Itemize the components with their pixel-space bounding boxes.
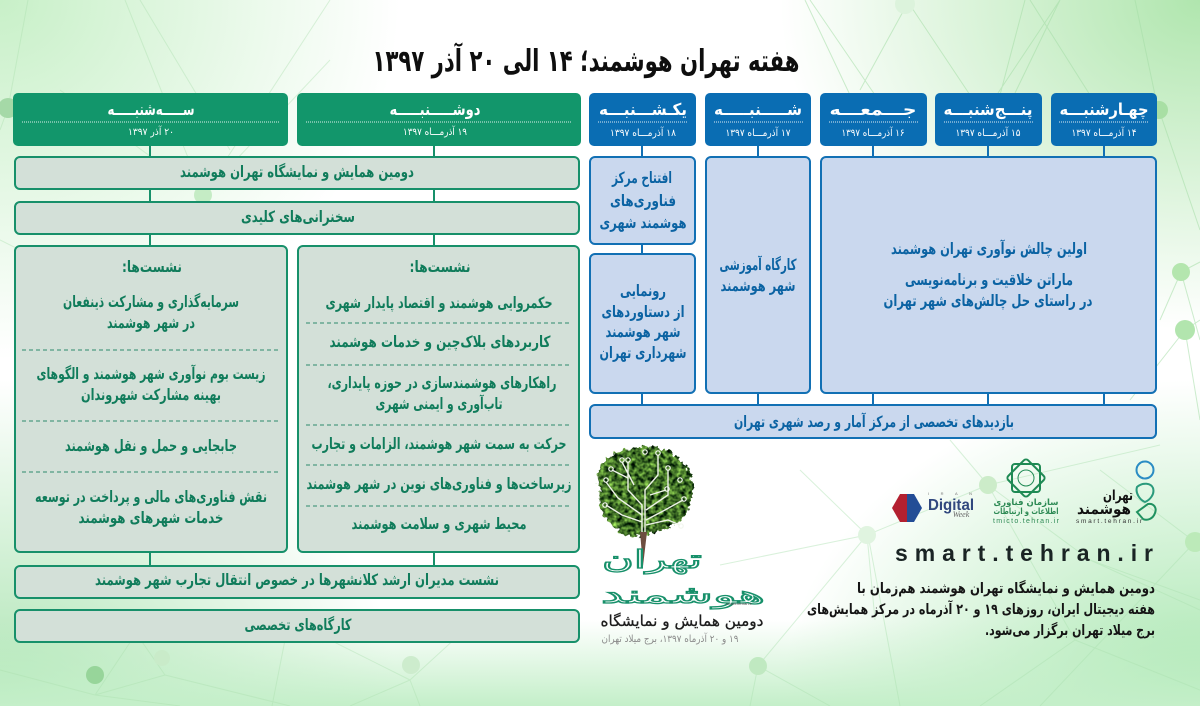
panel: achievements unveiling: رونمایی [620,282,666,300]
logo: circuit tree [598,447,693,566]
panel: center opening [590,157,695,244]
logo: Tehran Hooshmand small: smart.tehran.ir [1076,518,1143,525]
header: Wednesday [1051,93,1157,146]
logo: Tehran Hooshmand outlined wordmark: smart.tehran.ir [726,601,753,606]
header: Sunday [589,93,696,146]
panel: workshops row [15,610,579,642]
panel: Monday sessions: نشست‌ها: [410,258,470,276]
logo: Digital Week: IRAN [928,491,972,496]
logo: ICT organization: اطلاعات و ارتباطات [994,507,1059,517]
panel: specialist visits row [590,405,1156,438]
panel: training workshop [706,157,810,393]
header: Sunday: یکـشـــنبـــه [599,100,687,119]
website url: smart.tehran.ir [895,540,1153,566]
panel: Tuesday sessions: جابجایی و حمل و نقل هوشمند [65,437,237,455]
panel: Tuesday sessions [15,246,287,552]
logo: Digital Week: Digital [928,497,974,514]
panel: Monday sessions: تاب‌آوری و ایمنی شهری [376,394,502,413]
logo: Tehran Hooshmand small: هوشمند [1077,500,1131,518]
header: Monday [297,93,581,146]
panel: Tuesday sessions: نشست‌ها: [122,258,182,276]
logo: Tehran Hooshmand outlined wordmark [601,545,765,609]
panel: innovation challenge: ماراتن خلاقیت و برنامه‌نویسی [905,271,1073,289]
header: Wednesday: ۱۴ آذرمـــاه ۱۳۹۷ [1072,126,1136,139]
panel: Tuesday sessions: بهینه مشارکت شهروندان [81,386,221,404]
logo: ICT organization [993,458,1060,525]
panel: conference row: دومین همایش و نمایشگاه تهران هوشمند [180,162,414,181]
panel: innovation challenge: اولین چالش نوآوری تهران هوشمند [891,239,1087,259]
panel: senior managers row: نشست مدیران ارشد کلانشهرها در خصوص انتقال تجارب شهر هوشمند [95,571,499,589]
panel: center opening: فناوری‌های [610,192,676,210]
panel: Monday sessions: حرکت به سمت شهر هوشمند، الزامات و تجارب [312,435,566,453]
panel: Tuesday sessions: زیست بوم نوآوری شهر هوشمند و الگوهای [36,364,266,383]
panel: innovation challenge: در راستای حل چالش‌های شهر تهران [884,292,1093,311]
header: Tuesday: ۲۰ آذر ۱۳۹۷ [128,125,174,138]
logo caption: دومین همایش و نمایشگاه [600,612,764,630]
panel: Tuesday sessions: نقش فناوری‌های مالی و پرداخت در توسعه [35,488,267,507]
header: Tuesday [13,93,288,146]
connectors: blue columns [642,146,1104,404]
logo caption: ۱۹ و ۲۰ آذرماه ۱۳۹۷، برج میلاد تهران [602,632,738,645]
logo: Digital Week: Week [953,510,970,519]
panel: Monday sessions: محیط شهری و سلامت هوشمند [352,515,526,533]
header: Saturday: شـــــنبـــــه [714,100,802,119]
panel: training workshop: شهر هوشمند [720,277,796,295]
panel: specialist visits row: بازدیدهای تخصصی از مرکز آمار و رصد شهری تهران [734,412,1014,431]
header: Friday: جـــمعـــه [830,100,916,119]
logo: ICT organization: tmicto.tehran.ir [993,518,1060,525]
panel: Tuesday sessions: خدمات شهرهای هوشمند [78,509,224,527]
panel: innovation challenge [821,157,1156,393]
panel: center opening: افتتاح مرکز [611,169,672,187]
panel: training workshop: کارگاه آموزشی [720,255,797,274]
panel: achievements unveiling: شهرداری تهران [600,344,686,362]
header: Wednesday: چهـارشنبـــه [1060,100,1148,120]
logo: Tehran Hooshmand small: تهران [1103,488,1133,504]
panel: workshops row: کارگاه‌های تخصصی [244,615,352,634]
panel: Monday sessions: حکمروایی هوشمند و اقتصاد پایدار شهری [326,294,552,313]
panel: achievements unveiling: شهر هوشمند [606,323,680,341]
header: Thursday: ۱۵ آذرمـــاه ۱۳۹۷ [956,126,1020,139]
header: Thursday: پنـــج‌شنبـــه [944,100,1032,120]
logo: Digital Week [892,491,974,522]
header: Saturday: ۱۷ آذرمـــاه ۱۳۹۷ [726,126,791,139]
header: Thursday [935,93,1042,146]
logo: Tehran Hooshmand small [1076,462,1156,525]
panel: Monday sessions: زیرساخت‌ها و فناوری‌های نوین در شهر هوشمند [306,475,572,493]
panel: achievements unveiling [590,254,695,393]
title: هفته تهران هوشمند؛ ۱۴ الی ۲۰ آذر ۱۳۹۷ [372,42,800,79]
panel: Monday sessions: راهکارهای هوشمندسازی در حوزه پایداری، [328,374,556,393]
panel: Monday sessions [298,246,579,552]
header: Friday: ۱۶ آذرمـــاه ۱۳۹۷ [842,126,904,139]
panel: center opening: هوشمند شهری [600,214,686,232]
panel: senior managers row [15,566,579,598]
header: Tuesday: ســـــه‌شنبـــــه [108,100,194,119]
logo caption [600,612,764,645]
header: Monday: دوشـــــنبـــــه [390,100,480,120]
panel: conference row [15,157,579,189]
panel: Monday sessions: کاربردهای بلاک‌چین و خدمات هوشمند [330,333,551,352]
panel: achievements unveiling: از دستاوردهای [602,303,684,321]
panel: keynotes row [15,202,579,234]
header: Friday [820,93,927,146]
panel: Tuesday sessions: سرمایه‌گذاری و مشارکت ذینفعان [63,292,239,311]
header: Monday: ۱۹ آذرمـــاه ۱۳۹۷ [403,125,467,138]
logo: Tehran Hooshmand outlined wordmark: هوشمند [601,581,765,609]
connectors: green column [150,146,434,565]
header: Saturday [705,93,811,146]
header: Sunday: ۱۸ آذرمـــاه ۱۳۹۷ [610,126,677,139]
panel: Tuesday sessions: در شهر هوشمند [107,314,195,332]
description paragraph: هفته دیجیتال ایران، روزهای ۱۹ و ۲۰ آذرماه در مرکز همایش‌های [807,600,1155,618]
panel: keynotes row: سخنرانی‌های کلیدی [241,208,355,226]
description paragraph [807,579,1155,639]
logo: ICT organization: سازمان فناوری [994,498,1058,508]
logo: Tehran Hooshmand outlined wordmark: تهران [602,545,702,575]
